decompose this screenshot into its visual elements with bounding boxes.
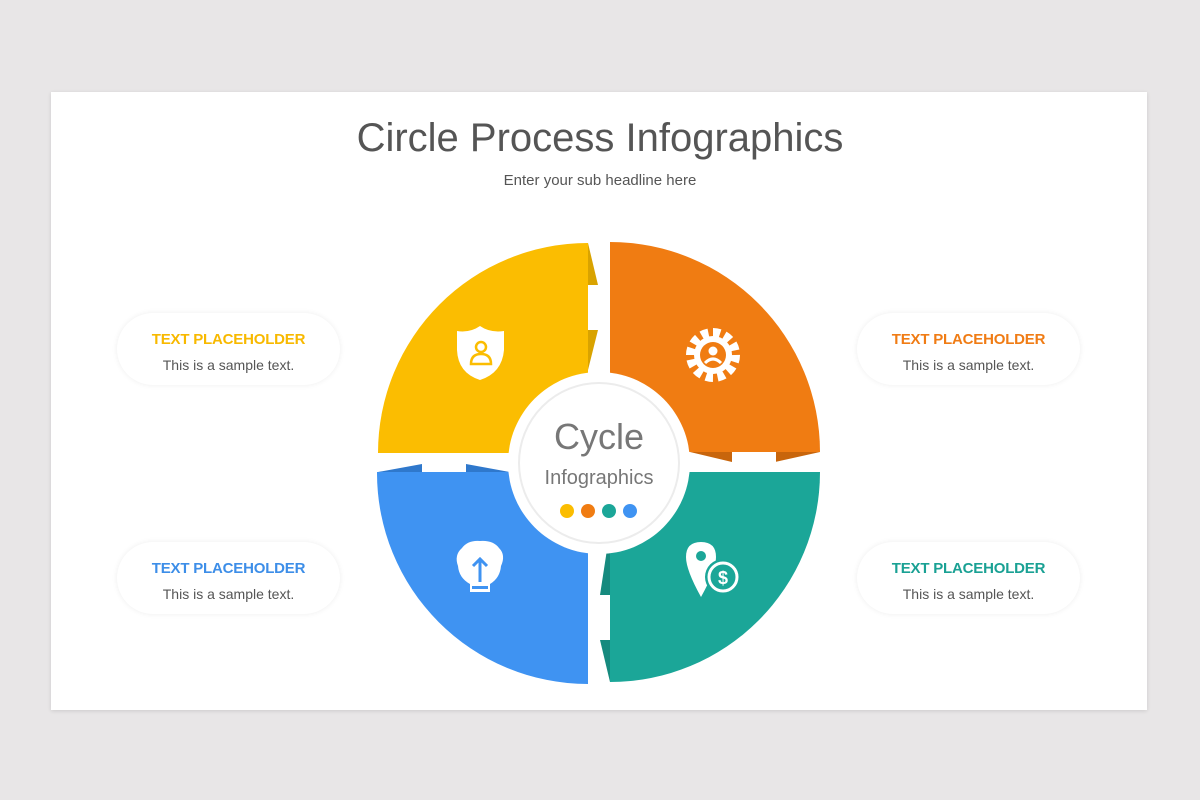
panel: bottom-right text: This is a sample text. [903,586,1034,602]
center circle: Cycle [554,416,644,457]
icon: location dollar [686,542,741,597]
icon: brain bulb [457,541,503,592]
panel: top-left text: This is a sample text. [163,357,294,373]
panel: bottom-left text [117,542,340,614]
segment: yellow [378,243,610,453]
title: Circle Process Infographics [357,116,843,160]
center circle [508,372,690,554]
subtitle: Enter your sub headline here [504,172,696,189]
segment: orange [610,242,820,472]
icon: location dollar: $ [718,568,728,588]
card background [51,92,1147,710]
icon: shield user [457,326,504,380]
panel: top-right text: This is a sample text. [903,357,1034,373]
panel: top-left text [117,313,340,385]
center circle: Infographics [545,467,653,489]
segment: blue [377,453,588,684]
panel: top-left text: TEXT PLACEHOLDER [152,331,305,348]
panel: bottom-left text: This is a sample text. [163,586,294,602]
panel: top-right text [857,313,1080,385]
panel: bottom-right text: TEXT PLACEHOLDER [892,560,1045,577]
panel: top-right text: TEXT PLACEHOLDER [892,331,1045,348]
segment: teal [588,472,820,682]
panel: bottom-left text: TEXT PLACEHOLDER [152,560,305,577]
panel: bottom-right text [857,542,1080,614]
icon: gear user [691,333,735,377]
